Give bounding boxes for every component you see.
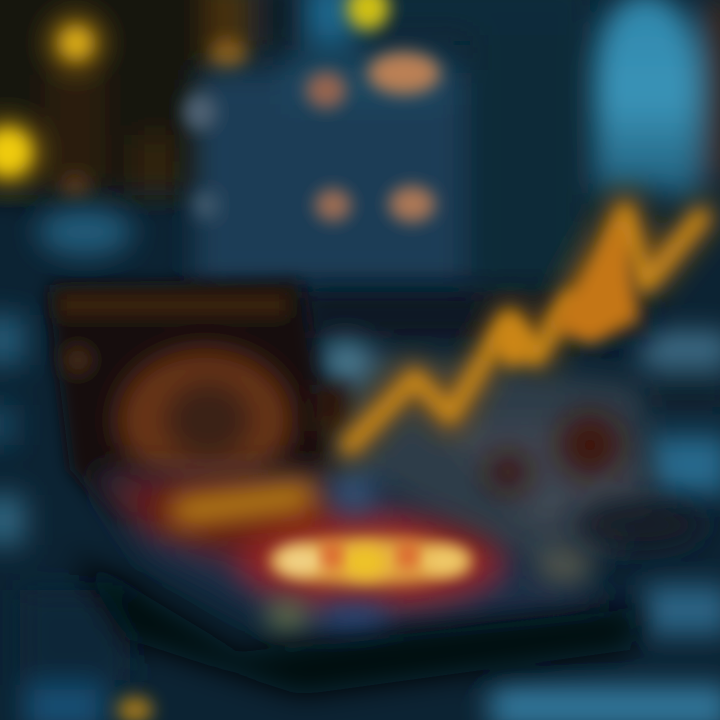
icon: copper coin [117,348,293,492]
panel: table surface [321,340,660,585]
panel: device front edge [70,550,640,695]
panel: orange label [169,481,316,526]
icon: yellow lights [0,15,246,197]
panel: window lights [183,52,440,222]
line chart: rising orange trend [345,205,705,450]
panel: right dark objects [486,413,705,551]
panel: coloured tiles [270,472,588,634]
icon: top yellow lamp [347,0,389,30]
panel: right side desk [0,315,720,720]
icon: bright screen glow [270,537,470,585]
panel: blue building wall [37,0,590,300]
panel: upper left dark wall [0,0,300,195]
panel: blue arched window [594,0,720,205]
small orange light bottom [117,696,153,720]
panel: dark band under wall [300,292,650,338]
panel: tablet device [48,280,348,520]
panel: screen glow base [90,470,620,640]
